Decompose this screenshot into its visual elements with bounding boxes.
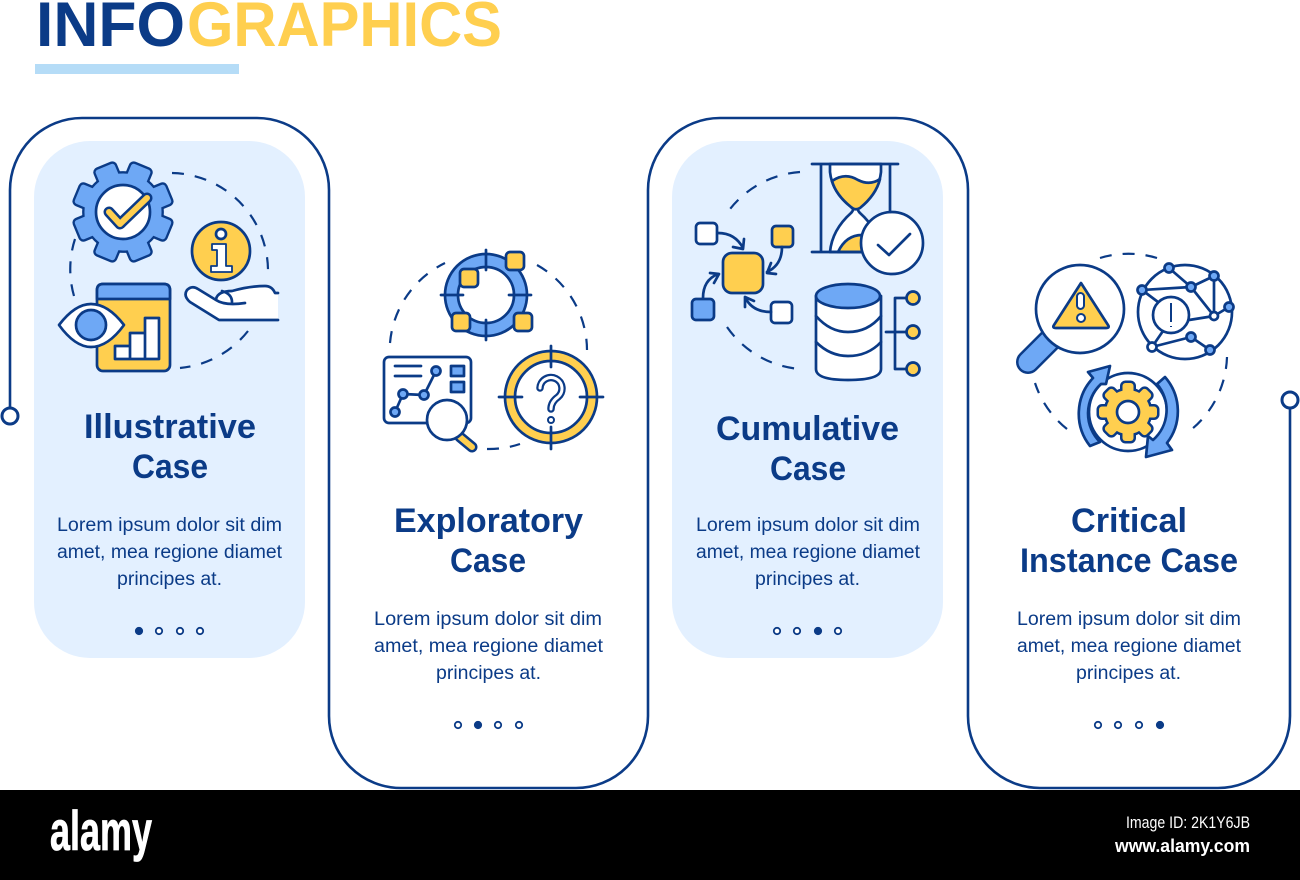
text block: exploratory case: principes at. (436, 663, 541, 684)
text block: cumulative case: principes at. (755, 569, 860, 590)
text block: exploratory case: amet, mea regione diamet (374, 636, 604, 657)
outline start node (2, 408, 18, 424)
text block: cumulative case: Lorem ipsum dolor sit dim (696, 515, 920, 536)
footer logo: alamy (50, 799, 152, 862)
panel: exploratory case (374, 250, 604, 728)
heading: cumulative case (716, 410, 899, 488)
panel: critical instance case (1017, 254, 1242, 728)
page dots: step 3 (774, 628, 841, 634)
footer url: www.alamy.com (1114, 836, 1250, 856)
text block: critical instance case: Lorem ipsum dolor sit dim (1017, 609, 1241, 630)
heading: cumulative case: Cumulative (716, 410, 899, 448)
heading: cumulative case: Case (770, 450, 846, 488)
heading: illustrative case: Case (132, 448, 208, 486)
title underline (35, 64, 239, 74)
icon: cumulative case cluster (692, 164, 923, 380)
text block: critical instance case (1017, 609, 1242, 684)
page dots: step 4 (1095, 722, 1163, 728)
text block: exploratory case (374, 609, 604, 684)
heading: critical instance case: Critical (1071, 502, 1187, 540)
heading: critical instance case (1020, 502, 1238, 580)
text block: critical instance case: amet, mea regione diamet (1017, 636, 1242, 657)
icon: illustrative case cluster (59, 163, 278, 371)
text block: illustrative case: principes at. (117, 569, 222, 590)
text block: critical instance case: principes at. (1076, 663, 1181, 684)
icon: exploratory case cluster (384, 250, 603, 449)
text block: exploratory case: Lorem ipsum dolor sit dim (374, 609, 602, 630)
panel: illustrative case (57, 163, 283, 634)
title (36, 0, 502, 60)
heading: exploratory case (394, 502, 583, 580)
text block: illustrative case: amet, mea regione diamet (57, 542, 283, 563)
panel background: cumulative (672, 141, 943, 658)
heading: illustrative case: Illustrative (84, 408, 256, 446)
heading: illustrative case (84, 408, 256, 486)
text block: cumulative case (696, 515, 921, 590)
heading: exploratory case: Case (450, 542, 526, 580)
heading: exploratory case: Exploratory (394, 502, 583, 540)
continuous outline connecting the four cards (10, 118, 1290, 788)
text block: illustrative case (57, 515, 283, 590)
panel: cumulative case (692, 164, 923, 634)
outline end node (1282, 392, 1298, 408)
heading: critical instance case: Instance Case (1020, 542, 1238, 580)
text block: illustrative case: Lorem ipsum dolor sit dim (57, 515, 282, 536)
page dots: step 2 (455, 722, 522, 728)
page dots: step 1 (136, 628, 203, 634)
panel background: illustrative (34, 141, 305, 658)
footer bar (0, 790, 1300, 880)
footer image id: Image ID: 2K1Y6JB (1126, 813, 1250, 832)
text block: cumulative case: amet, mea regione diamet (696, 542, 921, 563)
icon: critical instance case cluster (1028, 254, 1234, 457)
